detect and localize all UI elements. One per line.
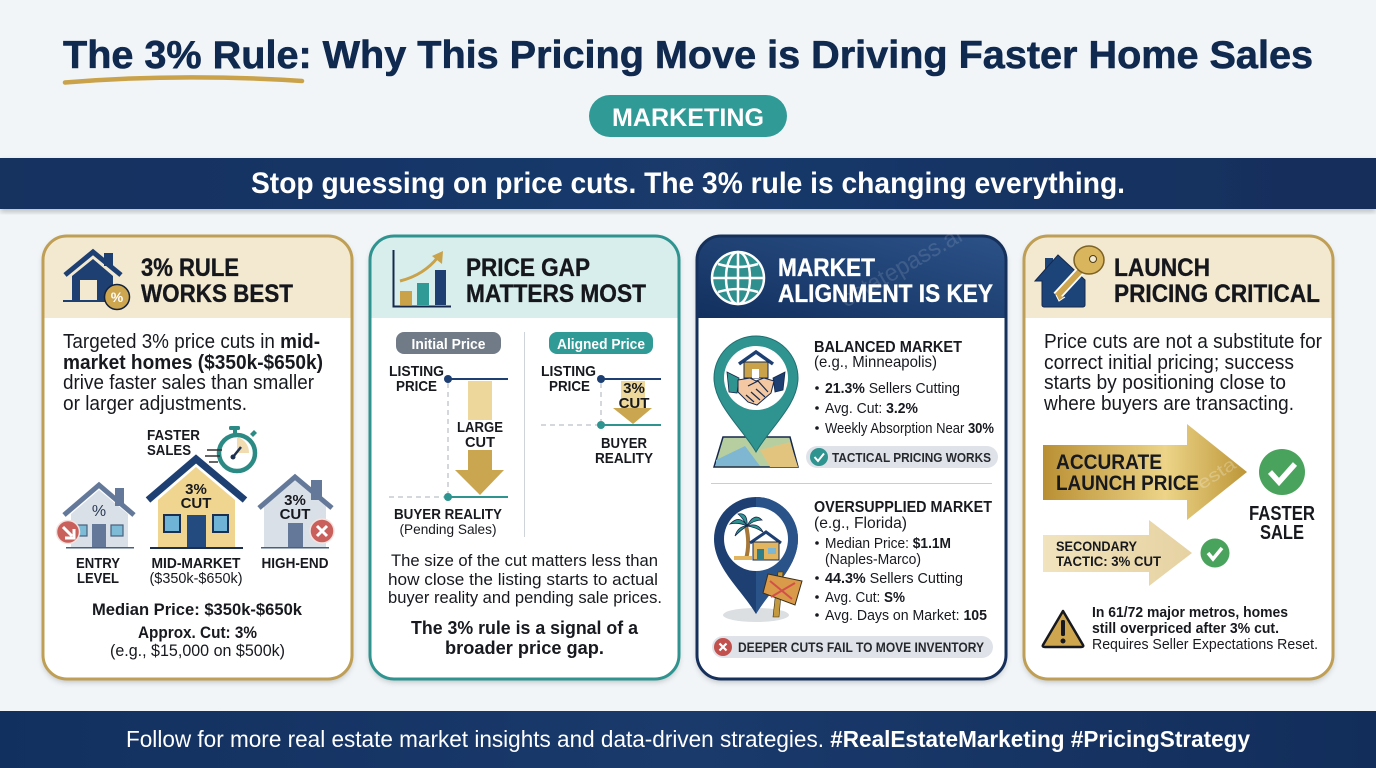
icon: house with percent badge (63, 252, 130, 310)
balanced market stats (814, 339, 994, 437)
diagram: large cut: BUYER REALITY (394, 506, 502, 523)
diagram: 3% cut: REALITY (595, 450, 653, 467)
oversupplied market stats: (e.g., Florida) (814, 515, 907, 532)
oversupplied market stats: OVERSUPPLIED MARKET (814, 499, 992, 516)
explanatory text: how close the listing starts to actual (388, 570, 658, 589)
icon: mid-market house: CUT (181, 495, 211, 512)
heading (466, 254, 646, 308)
icon: house with key (1035, 246, 1104, 307)
panel: 3% rule works best (43, 236, 352, 679)
icon: rising bar chart (394, 250, 451, 306)
icon: large green check (1259, 449, 1305, 495)
intro text (1043, 331, 1322, 415)
footer bar: Follow for more real estate market insights and data-driven strategies. #RealEstateMarketing #PricingStrategy (126, 726, 1250, 752)
diagram: 3% cut: LISTING (541, 363, 596, 380)
label: initial price (396, 332, 501, 354)
panel: price gap matters most (370, 236, 679, 679)
diagram: 3% cut: BUYER (601, 435, 647, 452)
heading (1114, 254, 1320, 308)
diagram: large cut: (Pending Sales) (400, 521, 496, 537)
oversupplied market stats (814, 499, 992, 624)
icon: entry level house (56, 485, 134, 548)
heading: PRICE GAP (466, 254, 590, 282)
icon: oversupplied market pin (714, 497, 802, 622)
house labels: HIGH-END (262, 555, 329, 572)
arrow: accurate launch price: LAUNCH PRICE (1056, 471, 1199, 495)
label: aligned price: Aligned Price (557, 336, 645, 353)
intro text: or larger adjustments. (63, 393, 247, 415)
panel: launch pricing critical (1024, 236, 1333, 679)
diagram: large cut: CUT (465, 434, 495, 451)
house labels: MID-MARKET (152, 555, 240, 572)
callout: deeper cuts fail (712, 636, 993, 658)
diagram: 3% cut: PRICE (549, 378, 590, 395)
callout: tactical pricing works (806, 446, 998, 468)
intro text: drive faster sales than smaller (63, 372, 314, 394)
faster sale label: FASTER (1249, 503, 1315, 525)
icon: entry level house: % (92, 503, 106, 520)
arrow: secondary tactic (1043, 520, 1192, 586)
explanatory text: buyer reality and pending sale prices. (388, 588, 662, 607)
arrow: secondary tactic: SECONDARY (1056, 538, 1138, 554)
heading: 3% RULE (141, 254, 239, 282)
house labels: ($350k-$650k) (150, 571, 242, 587)
takeaway: The 3% rule is a signal of a (411, 618, 639, 638)
explanatory text: The size of the cut matters less than (391, 551, 658, 570)
balanced market stats: Avg. Cut: 3.2% (825, 401, 918, 417)
warning text: In 61/72 major metros, homes (1092, 605, 1288, 621)
house labels: ENTRY (76, 555, 120, 572)
faster sales label (147, 427, 200, 459)
heading: MARKET (778, 254, 875, 282)
arrow: accurate launch price: ACCURATE (1056, 450, 1162, 474)
icon: mid-market house: 3% (185, 481, 207, 498)
diagram: large cut: PRICE (396, 378, 437, 395)
balanced market stats: (e.g., Minneapolis) (814, 354, 937, 371)
balanced market stats: Weekly Absorption Near 30% (825, 421, 994, 437)
arrow: secondary tactic: TACTIC: 3% CUT (1056, 553, 1161, 569)
intro text: Price cuts are not a substitute for (1044, 331, 1322, 353)
intro text: correct initial pricing; success (1044, 352, 1294, 374)
icon: stopwatch (205, 426, 257, 471)
pricing summary: Approx. Cut: 3% (138, 623, 257, 642)
callout: deeper cuts fail: DEEPER CUTS FAIL TO MOVE INVENTORY (738, 640, 984, 655)
icon: high-end house (259, 477, 334, 548)
pricing summary (92, 600, 303, 660)
explanatory text (388, 551, 662, 607)
diagram: 3% cut: 3% (623, 380, 645, 397)
diagram: 3% cut: CUT (619, 395, 649, 412)
heading: MATTERS MOST (466, 280, 646, 308)
heading (778, 254, 993, 308)
icon: house with percent badge: % (111, 289, 124, 305)
house labels: LEVEL (77, 570, 119, 587)
oversupplied market stats: Avg. Days on Market: 105 (825, 608, 987, 624)
category pill (589, 95, 787, 137)
faster sales label: FASTER (147, 427, 200, 444)
faster sale label: SALE (1260, 522, 1304, 544)
footer bar (0, 711, 1376, 768)
intro text: where buyers are transacting. (1043, 393, 1294, 415)
oversupplied market stats: Avg. Cut: S% (825, 590, 905, 606)
house labels (76, 555, 329, 587)
warning text: still overpriced after 3% cut. (1092, 621, 1279, 637)
takeaway (411, 618, 639, 658)
faster sale label (1249, 503, 1315, 544)
subtitle banner: Stop guessing on price cuts. The 3% rule is changing everything. (251, 167, 1125, 200)
diagram: 3% cut (541, 363, 661, 467)
oversupplied market stats: 44.3% Sellers Cutting (825, 571, 963, 587)
balanced market stats: BALANCED MARKET (814, 339, 962, 356)
icon: globe (712, 252, 764, 304)
intro text: market homes ($350k-$650k) (63, 352, 323, 374)
heading (141, 254, 293, 308)
diagram: large cut (389, 363, 508, 537)
icon: high-end house: CUT (280, 506, 310, 523)
oversupplied market stats: Median Price: $1.1M (825, 536, 951, 552)
warning text (1092, 605, 1318, 653)
title: The 3% Rule: Why This Pricing Move is Driving Faster Home Sales (63, 34, 1313, 77)
icon: balanced market pin (714, 336, 798, 467)
watermark: estatepass.ai (836, 222, 967, 313)
heading: PRICING CRITICAL (1114, 280, 1320, 308)
callout: tactical pricing works: TACTICAL PRICING WORKS (832, 450, 991, 465)
intro text: starts by positioning close to (1044, 372, 1286, 394)
pricing summary: (e.g., $15,000 on $500k) (110, 641, 285, 660)
panel: market alignment is key (697, 222, 1006, 679)
arrow: accurate launch price (1043, 424, 1247, 520)
warning text: Requires Seller Expectations Reset. (1092, 637, 1318, 653)
intro text: Targeted 3% price cuts in mid- (63, 331, 320, 353)
icon: mid-market house (148, 459, 245, 549)
balanced market stats: 21.3% Sellers Cutting (825, 381, 960, 397)
diagram: large cut: LARGE (457, 419, 503, 436)
icon: small green check (1200, 538, 1230, 568)
faster sales label: SALES (147, 442, 191, 459)
subtitle banner (0, 158, 1376, 209)
arrow: accurate launch price: esta (1193, 453, 1240, 493)
icon: high-end house: 3% (284, 492, 306, 509)
diagram: large cut: LISTING (389, 363, 444, 380)
takeaway: broader price gap. (445, 638, 604, 658)
icon: warning triangle (1043, 611, 1083, 647)
intro text (63, 331, 323, 415)
pricing summary: Median Price: $350k-$650k (92, 600, 303, 619)
heading: ALIGNMENT IS KEY (778, 280, 993, 308)
oversupplied market stats: (Naples-Marco) (825, 552, 921, 568)
label: initial price: Initial Price (412, 336, 486, 353)
heading: WORKS BEST (141, 280, 293, 308)
heading: LAUNCH (1114, 254, 1210, 282)
category pill: MARKETING (612, 104, 764, 132)
